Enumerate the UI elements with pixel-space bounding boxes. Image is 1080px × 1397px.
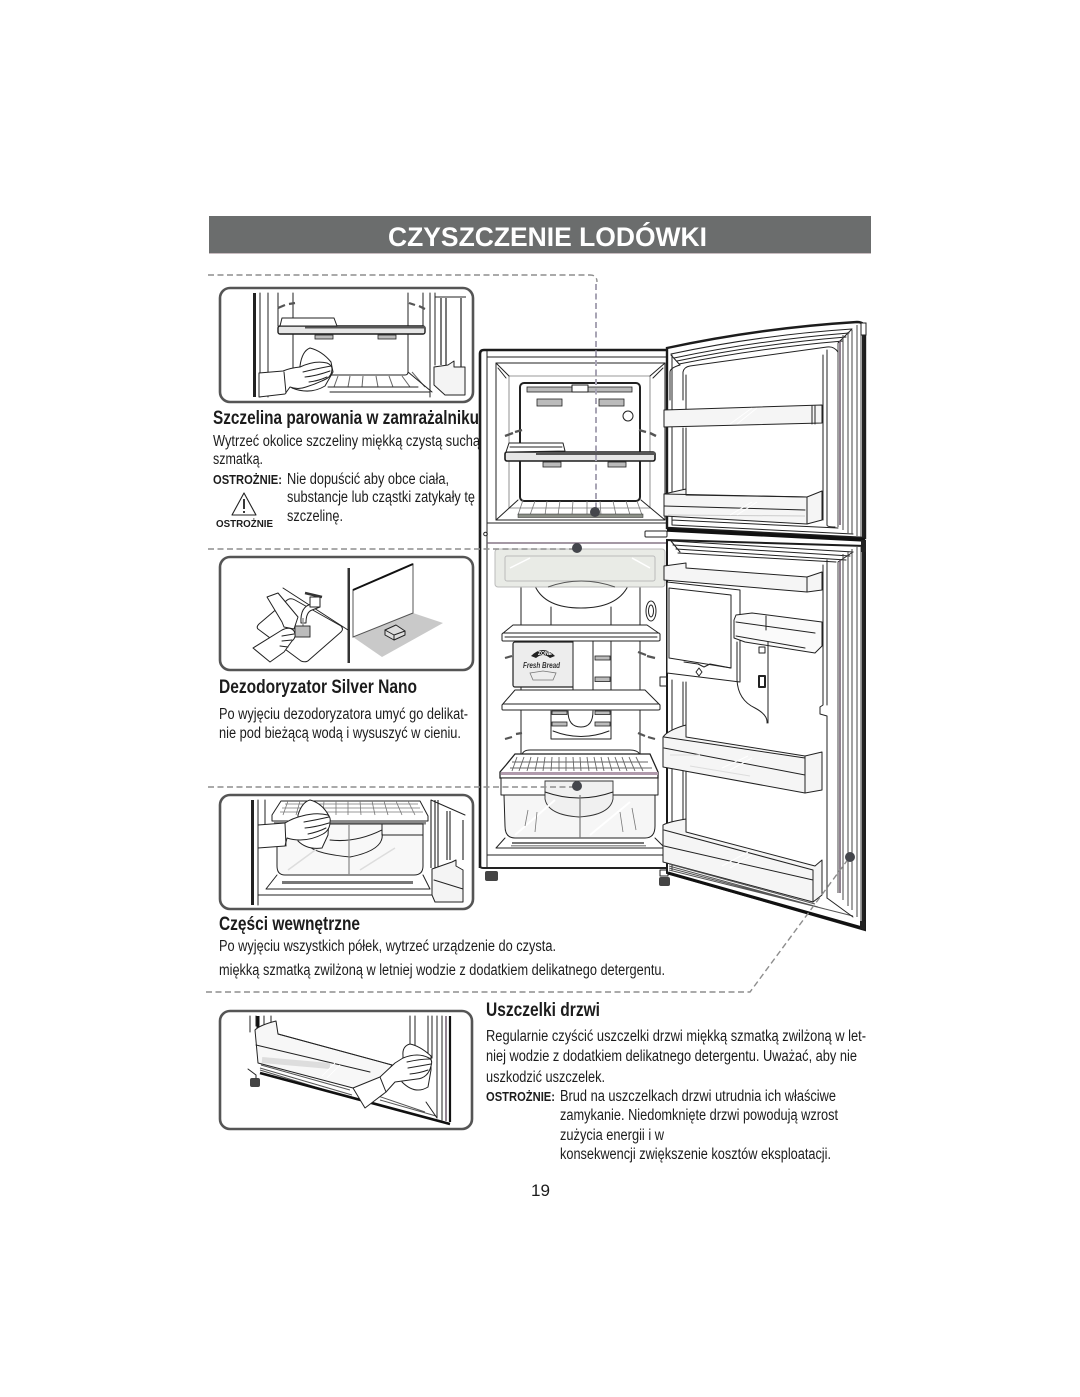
door frame [671,540,866,926]
door bin [434,361,465,395]
door bin [255,1021,392,1088]
caution: evaporator slot: Nie dopuścić aby obce ciała, [287,471,449,488]
text: evaporator instructions [213,433,480,468]
text: deodorizer instructions: Po wyjęciu dezodoryzatora umyć go delikat- [219,706,468,723]
text: interior instructions: Po wyjęciu wszystkich półek, wytrzeć urządzenie do czysta. [219,938,556,955]
icon: wiping hand with cloth [258,800,330,848]
badge [623,411,633,421]
upper door shelf [664,405,822,427]
icon: warning triangle [216,493,273,530]
panel: door seal illustration [220,1011,472,1129]
washing at faucet [253,588,348,662]
panel: deodorizer illustration [220,557,473,670]
box label fresh bread: Fresh Bread [523,661,561,670]
text: door seals instructions [486,1028,866,1086]
caution: door seals: konsekwencji zwiększenie kosztów eksploatacji. [560,1146,831,1163]
heading: deodorizer: Dezodoryzator Silver Nano [219,677,417,698]
refrigerator cabinet [480,350,670,886]
floor ribs [334,372,425,387]
hinge [660,677,667,686]
dashed leader: interior parts [208,786,575,788]
text: evaporator instructions: Wytrzeć okolice szczeliny miękką czystą suchą [213,433,480,450]
caution: door seals [486,1088,839,1163]
freezer floor [487,522,668,524]
dashed leader: door seals [206,858,849,992]
panel: freezer evaporator slot illustration [220,288,473,402]
crisper bin [272,801,428,875]
crisper drawer [500,750,658,838]
heading: evaporator slot: Szczelina parowania w zamrażalniku [213,408,479,429]
door bottom gasket [668,864,865,929]
drying board in shade [353,564,443,657]
drawer floor [266,875,430,889]
door frame verticals [250,1016,442,1120]
text: deodorizer instructions [219,706,468,742]
caution: door seals: OSTROŻNIE: [486,1089,555,1104]
door frame [670,323,866,537]
text: door seals instructions: uszkodzić uszczelek. [486,1069,605,1086]
heading: door seals: Uszczelki drzwi [486,1000,600,1021]
vents [315,335,396,339]
caution: door seals: zamykanie. Niedomknięte drzwi powodują wzrost [560,1107,839,1124]
title banner [209,216,871,254]
side column and vents [573,640,611,690]
icon: wiping hand with cloth [353,1044,432,1108]
caution: door seals: Brud na uszczelkach drzwi utrudnia ich właściwe [560,1088,836,1105]
bottom door bin [663,819,822,902]
fresh bread box [513,642,575,687]
ice tray [506,443,565,452]
lower door bin [664,489,822,524]
caution: evaporator slot: OSTROŻNIE: [213,472,282,487]
text: evaporator instructions: szmatką. [213,451,263,468]
middle door bin [663,725,822,793]
freezer clips [505,430,656,436]
freezer shelf [278,326,425,334]
leader dot: evaporator [590,507,600,517]
tray [280,318,337,326]
text: door seals instructions: niej wodzie z dodatkiem delikatnego detergentu. Uważać, aby nie [486,1048,857,1065]
side door parts [431,800,463,868]
heading: interior parts: Części wewnętrzne [219,914,360,935]
freezer compartment [484,363,668,543]
refrigerator door [663,540,866,930]
page number: 19 [531,1181,550,1200]
icon: warning triangle: OSTROŻNIE [216,517,273,530]
box label zone: ZONE [538,651,553,657]
leader dot: crisper [572,781,582,791]
caution: evaporator slot: szczelinę. [287,508,343,525]
dashed leader: freezer evaporator slot [208,275,597,282]
top door bin of lower door [664,563,822,592]
leader dot: door seal [845,852,855,862]
fridge clips [505,652,655,739]
text: interior instructions: miękką szmatką zwilżoną w letniej wodzie z dodatkiem delikatnego detergentu. [219,962,665,979]
freezer shelf [505,452,655,461]
text: deodorizer instructions: nie pod bieżącą wodą i wysuszyć w cieniu. [219,725,461,742]
fridge compartment upper cover [495,549,665,755]
back wall recess [551,711,611,739]
dashed leader: deodorizer [208,548,575,550]
caution: evaporator slot: substancje lub cząstki zatykały tę [287,489,475,506]
dashed leader: freezer vertical [595,284,597,510]
freezer vents [527,385,632,467]
lower glass shelf [502,690,660,710]
text: interior instructions [219,938,665,979]
caution: evaporator slot [213,471,475,525]
title text: CZYSZCZENIE LODÓWKI [388,221,707,252]
leader dot: deodorizer [572,543,582,553]
freezer door [664,322,866,540]
feet [485,870,670,886]
gasket [260,1065,436,1116]
door divider [667,530,865,540]
foot [248,1069,260,1087]
clips [278,303,425,309]
caution: door seals: zużycia energii i w [560,1127,665,1144]
drawer floor [496,838,665,848]
small door bin [734,613,822,723]
icon: wiping hand with cloth [259,348,333,397]
upper glass shelf [502,625,660,641]
text: door seals instructions: Regularnie czyścić uszczelki drzwi miękką szmatką zwilżoną w let- [486,1028,866,1045]
water dispenser panel [667,582,740,682]
panel: interior cleaning illustration [220,795,473,909]
